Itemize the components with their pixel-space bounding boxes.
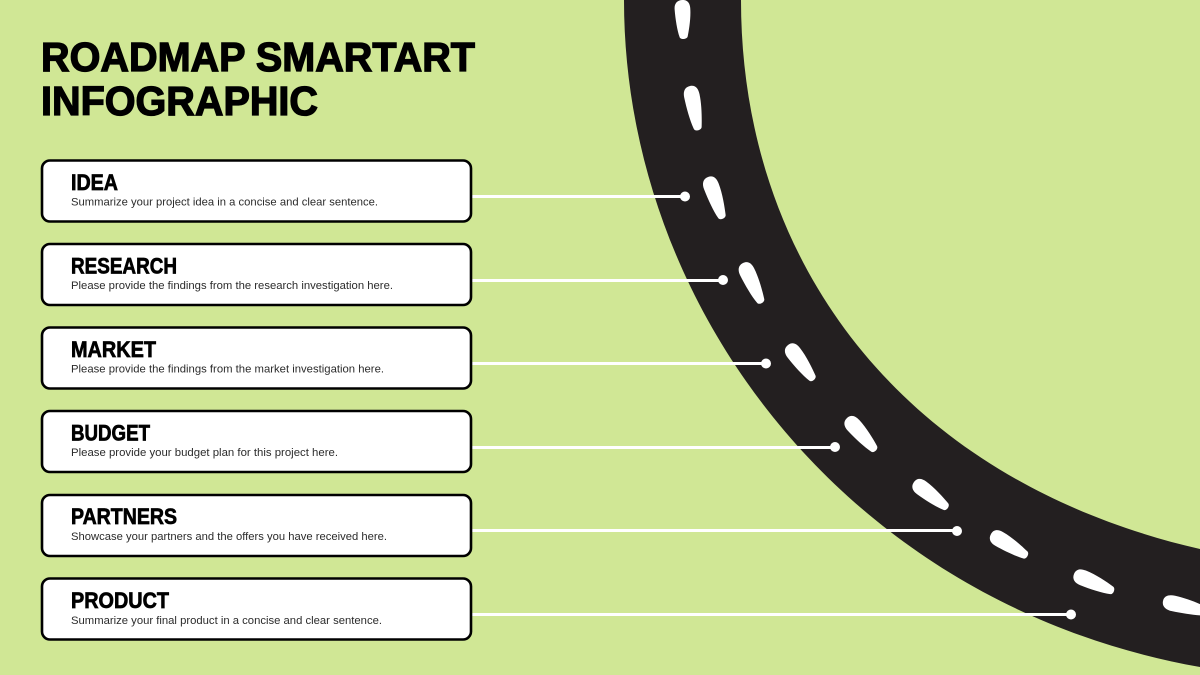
card: idea: IDEA (71, 170, 118, 195)
road (624, 0, 1200, 667)
connector: budget (472, 442, 840, 452)
card: research: Please provide the findings from the research investigation here. (71, 280, 393, 292)
title (41, 34, 475, 124)
connector: partners (472, 526, 962, 536)
road lane dashes (674, 0, 1200, 619)
card: market: Please provide the findings from the market investigation here. (71, 364, 384, 376)
card: budget: Please provide your budget plan for this project here. (71, 447, 338, 459)
title: INFOGRAPHIC (41, 78, 318, 124)
connector: idea (472, 192, 690, 202)
card: partners: PARTNERS (71, 504, 177, 529)
card: partners (42, 495, 471, 556)
title: ROADMAP SMARTART (41, 34, 475, 80)
card: product: Summarize your final product in a concise and clear sentence. (71, 615, 382, 627)
card: market: MARKET (71, 337, 157, 362)
card: idea: Summarize your project idea in a concise and clear sentence. (71, 196, 378, 208)
card: budget: BUDGET (71, 420, 150, 446)
card: idea (42, 160, 471, 222)
card: market (42, 328, 471, 388)
connector: product (472, 610, 1076, 620)
card: research (42, 244, 471, 305)
card: budget (42, 411, 471, 472)
connector: research (472, 275, 728, 285)
card: product: PRODUCT (71, 588, 170, 613)
connector: market (472, 358, 771, 368)
card: product (42, 578, 471, 640)
card: research: RESEARCH (71, 254, 177, 278)
card: partners: Showcase your partners and the offers you have received here. (71, 531, 387, 543)
